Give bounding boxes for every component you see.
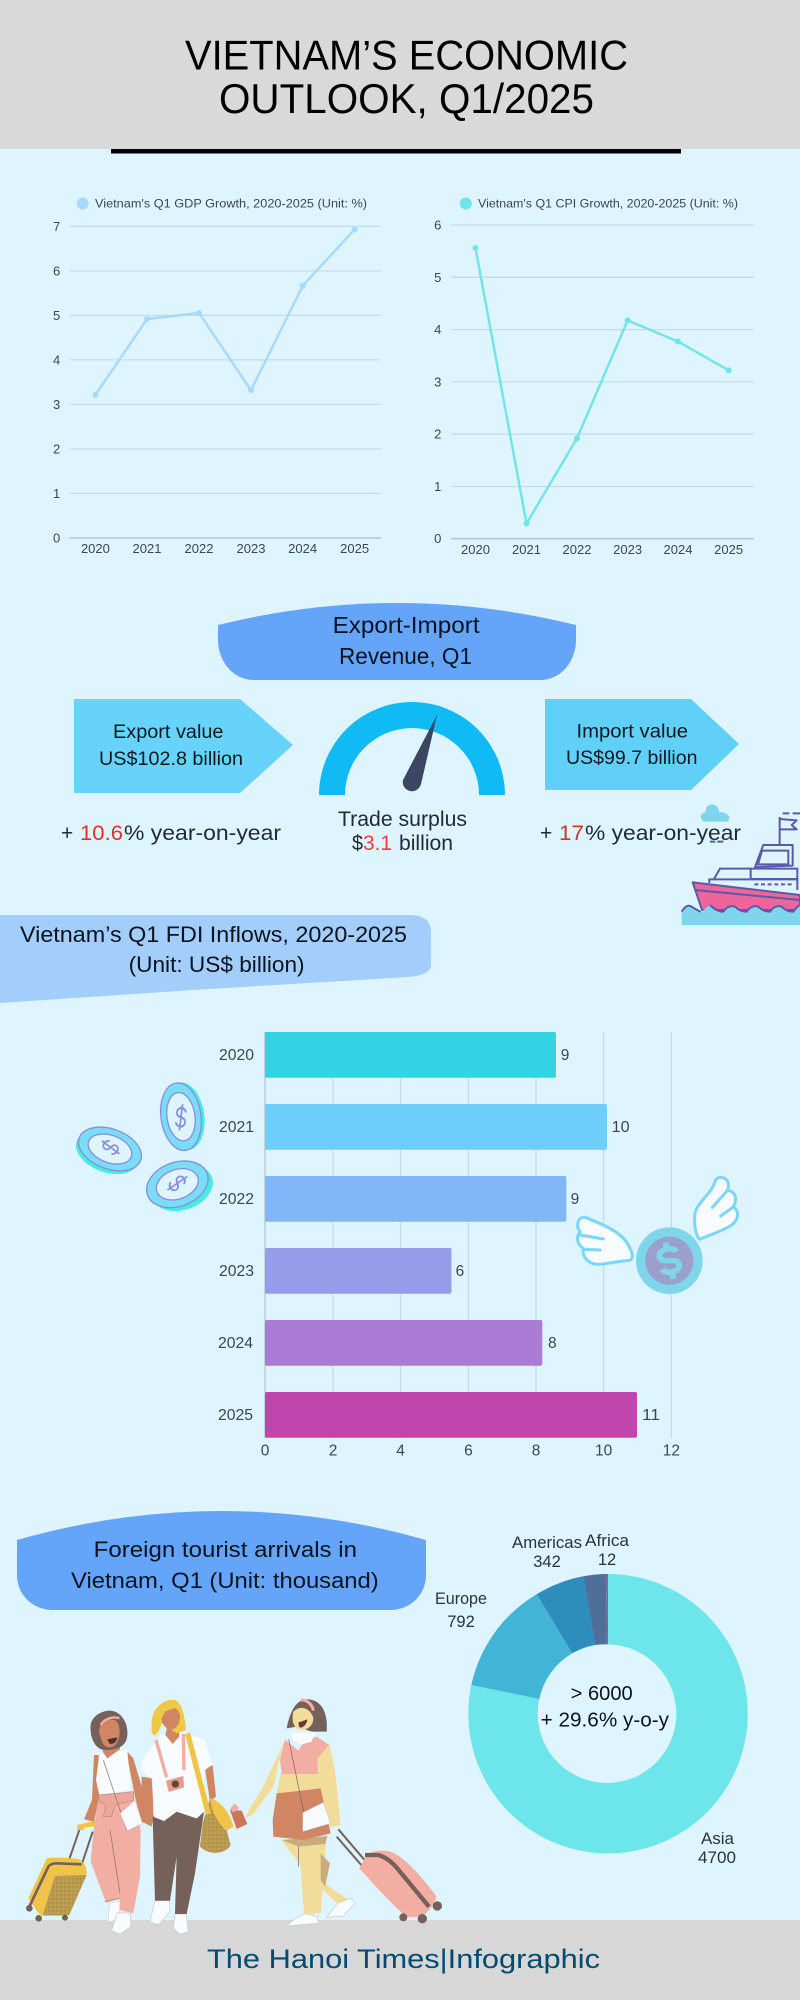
value axis: 10 [595,1443,613,1460]
line chart: CPI growth: 4 [434,322,441,337]
year labels: 2023 [219,1263,254,1280]
arrow: export value: Export value [113,722,224,743]
line chart: CPI growth: 2022 [563,542,591,557]
line chart: GDP growth: 2020 [81,541,110,556]
value axis: 8 [532,1443,540,1460]
line chart: CPI growth [434,196,754,557]
donut labels: 342 [533,1553,561,1571]
value axis: 12 [663,1443,680,1460]
value labels: 10 [612,1119,630,1136]
line chart: GDP growth: 0 [53,530,60,546]
value labels: 9 [561,1047,569,1064]
donut labels: 792 [447,1613,475,1631]
legend: GDP: Vietnam's Q1 GDP Growth, 2020-2025 (Unit: %) [95,196,367,210]
text: import growth: 17 [559,822,584,845]
line chart: CPI growth: 2020 [461,542,490,557]
donut labels: Americas [512,1534,582,1552]
line chart: GDP growth: 2022 [185,541,213,556]
gauge: trade surplus [319,702,505,795]
text: export growth: 10.6 [80,822,123,845]
line chart: CPI growth: 5 [434,270,441,285]
text: export growth [61,822,281,845]
coin bottom right [140,1152,219,1221]
line chart: GDP growth: 1 [53,486,60,501]
banner: foreign tourist arrivals: Foreign tourist arrivals in [94,1537,357,1562]
donut labels: Africa [585,1532,630,1550]
footer: The Hanoi Times|Infographic [207,1944,600,1974]
line chart: CPI growth: 0 [434,531,441,546]
banner: foreign tourist arrivals [17,1511,426,1610]
footer [0,1920,800,2000]
donut labels: Europe [435,1590,487,1608]
yellow suitcase [26,1821,95,1922]
illustration: traveller right with suitcase [230,1699,442,1926]
illustration: travellers left pair [26,1700,233,1934]
line chart: GDP growth: 2024 [288,541,317,556]
segment: Africa [606,1574,608,1644]
coin left [70,1119,148,1183]
line chart: CPI growth: 2021 [512,542,541,557]
GDP line [92,226,358,398]
segment: Europe [471,1594,572,1699]
icon: winged coin [578,1177,738,1294]
donut labels: 12 [598,1551,616,1569]
segment: Oceania [583,1574,607,1645]
line chart: GDP growth: 3 [53,397,60,412]
traveller 2 [141,1700,233,1934]
segment: Asia [468,1574,748,1853]
banner: FDI inflows: (Unit: US$ billion) [129,952,305,977]
line chart: CPI growth: 6 [434,218,441,232]
line chart: GDP growth: 5 [53,308,60,323]
traveller 1 [84,1711,153,1934]
line chart: CPI growth: 2 [434,427,441,442]
arrow: export value [74,699,293,793]
pink suitcase [337,1829,442,1923]
bars [265,1032,637,1438]
value labels: 8 [548,1335,557,1352]
value labels: 9 [571,1191,579,1208]
donut labels [435,1532,736,1867]
title: VIETNAM’S ECONOMIC [185,32,628,78]
value labels [456,1047,660,1424]
text: import growth: % year-on-year [585,822,741,845]
legend: CPI: Vietnam's Q1 CPI Growth, 2020-2025 (Unit: %) [478,196,738,210]
banner: export-import revenue [218,603,576,680]
text: trade surplus value [338,808,467,855]
line chart: CPI growth: 3 [434,374,441,389]
text: trade surplus value: $ [352,832,363,855]
banner: FDI inflows [0,915,431,1003]
year labels: 2025 [218,1407,253,1424]
line chart: GDP growth: 2023 [237,541,265,556]
gauge needle [403,715,437,791]
text: trade surplus value: 3.1 [363,832,392,855]
banner: export-import revenue: Export-Import [333,612,480,638]
donut labels: Asia [701,1830,735,1848]
icon: three coins [70,1080,219,1221]
value axis [261,1443,680,1460]
icon: ship and cloud [682,804,800,925]
donut centre text: + 29.6% y-o-y [541,1710,669,1732]
year labels [218,1047,254,1424]
left wing [578,1217,632,1264]
CPI line [472,245,732,526]
value axis: 2 [329,1443,337,1460]
title header [0,0,800,154]
value labels: 6 [456,1263,464,1280]
line chart: GDP growth: 2025 [340,541,369,556]
line chart: GDP growth: 7 [53,219,60,234]
text: trade surplus value: billion [399,832,453,855]
banner: export-import revenue: Revenue, Q1 [339,643,472,669]
segment: Americas [537,1576,595,1653]
line chart: CPI growth: 1 [434,479,441,494]
traveller 3 [230,1699,355,1926]
text: export growth: + [61,822,73,845]
value axis: 6 [464,1443,473,1460]
donut centre text [541,1683,669,1732]
coin top right [156,1080,209,1153]
icon: cloud [701,804,729,822]
donut chart: tourist arrivals by region [435,1532,748,1867]
line chart: GDP growth: 2 [53,442,60,456]
coin [636,1227,703,1294]
line chart: GDP growth: 6 [53,264,60,278]
arrow: import value: Import value [576,722,688,743]
year labels: 2020 [219,1047,254,1064]
value axis: 0 [261,1443,270,1460]
text: trade surplus value: Trade surplus [338,808,467,831]
line chart: GDP growth: 4 [53,352,60,368]
value labels: 11 [642,1407,660,1424]
text: import growth: + [540,822,552,845]
banner: FDI inflows: Vietnam’s Q1 FDI Inflows, 2020-2025 [20,922,407,947]
bar chart: FDI inflows [218,1032,680,1460]
value axis: 4 [396,1443,405,1460]
text: export growth: % year-on-year [124,822,281,845]
arrow: import value: US$99.7 billion [566,748,698,769]
right wing [695,1177,738,1239]
line chart: CPI growth: 2023 [613,542,642,557]
line chart: CPI growth: 2025 [714,542,743,557]
line chart: CPI growth: 2024 [664,542,692,557]
year labels: 2024 [218,1335,253,1352]
title: OUTLOOK, Q1/2025 [219,75,594,122]
donut labels: 4700 [698,1849,736,1867]
arrow: export value: US$102.8 billion [99,749,243,770]
banner: foreign tourist arrivals: Vietnam, Q1 (Unit: thousand) [71,1568,379,1593]
year labels: 2021 [219,1119,254,1136]
line chart: GDP growth [53,196,381,556]
year labels: 2022 [219,1191,254,1208]
arrow: import value [545,699,739,790]
donut centre text: > 6000 [571,1683,633,1705]
line chart: GDP growth: 2021 [133,541,161,556]
